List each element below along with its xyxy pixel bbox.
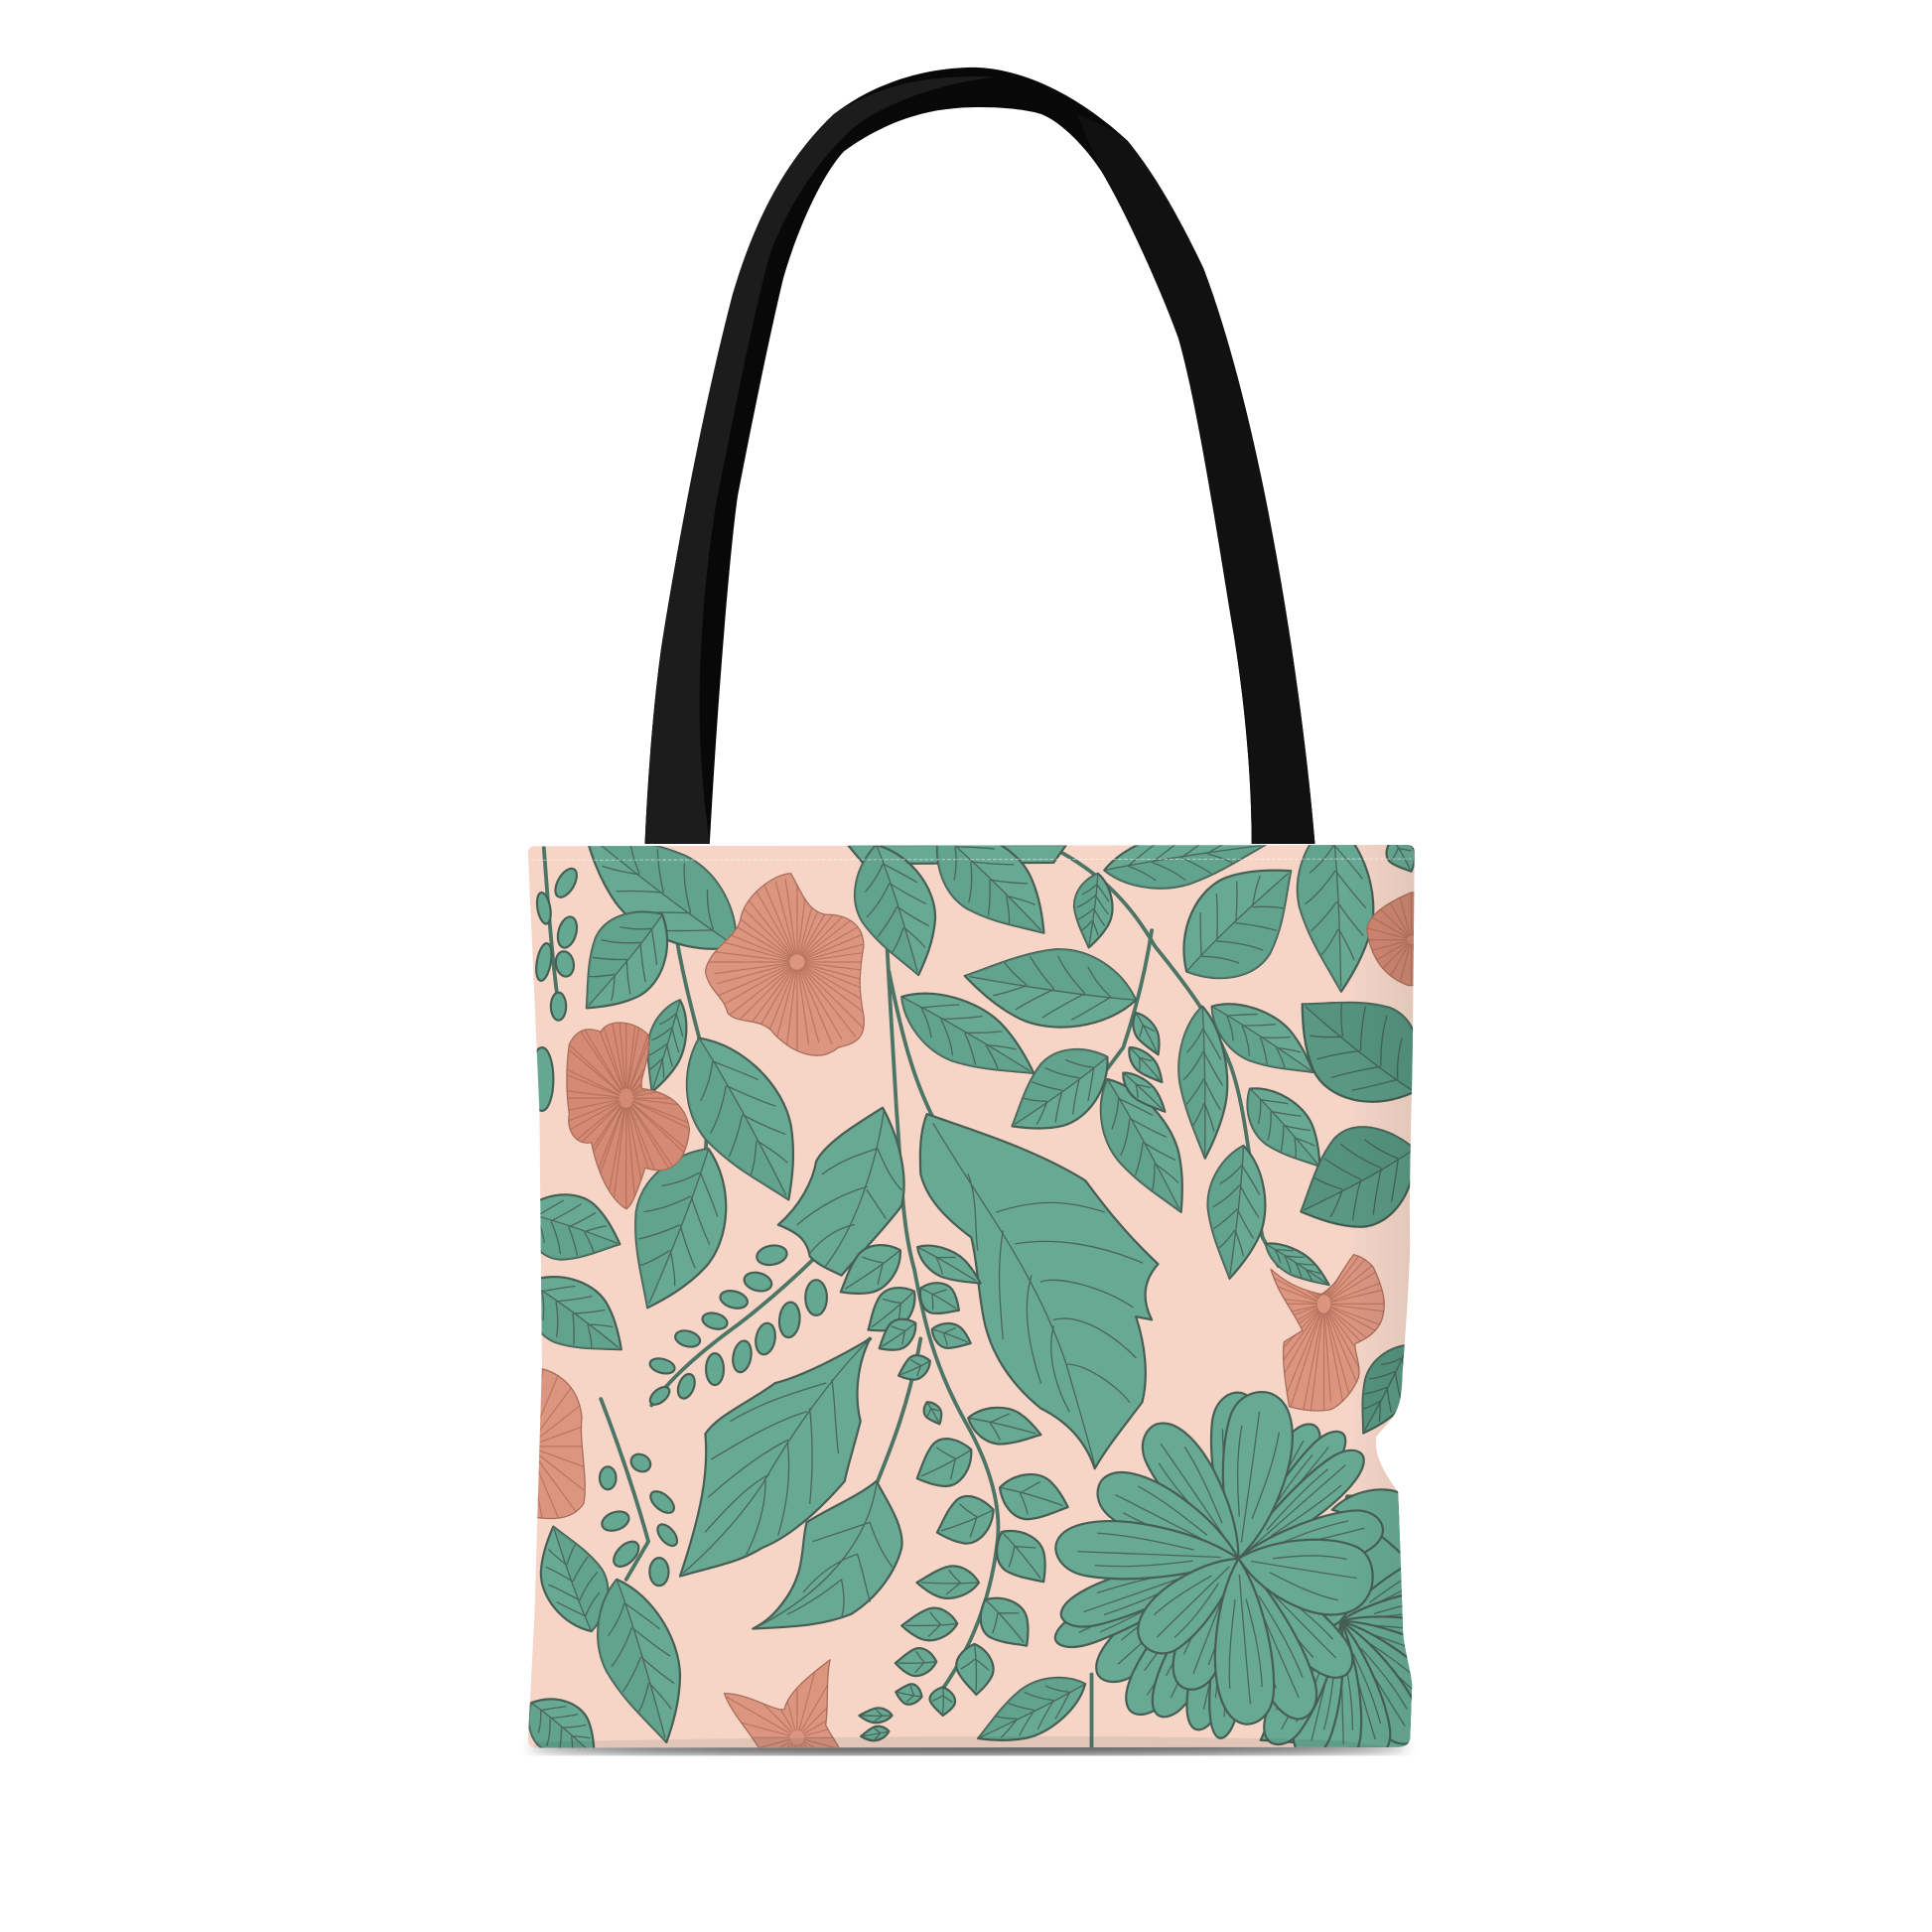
coral flower: left edge	[537, 1368, 586, 1519]
peach fabric background	[522, 839, 1421, 1753]
large teal flower	[1048, 1387, 1388, 1727]
upper-right leaf branch	[963, 845, 1330, 1287]
sprig: top left corner	[534, 865, 581, 1021]
large central leaf	[920, 1114, 1158, 1468]
coral flower: right	[1270, 1254, 1385, 1412]
coral flower: top	[705, 873, 865, 1056]
top-left leaves	[586, 846, 794, 1309]
sprig: middle left	[647, 1243, 827, 1408]
left edge leaves	[508, 1047, 701, 1777]
central left leaf	[778, 1108, 904, 1276]
back teal flower, lower right	[1259, 1488, 1412, 1747]
top-center leaves	[847, 846, 1067, 1074]
coral flower: bottom	[724, 1659, 840, 1747]
bottom leaf	[977, 1676, 1086, 1741]
tote bag body with floral print	[528, 845, 1415, 1747]
right edge leaves	[1271, 818, 1447, 1444]
sprig: lower left	[600, 1450, 681, 1586]
lower-left large leaf	[680, 1338, 870, 1577]
fabric shading and seam	[531, 839, 1421, 1753]
central cascading leaflets	[829, 1233, 1074, 1743]
back teal petals, lower left	[1095, 1624, 1235, 1739]
lower-center leaf	[753, 1481, 902, 1629]
coral flower: top right edge	[1366, 892, 1414, 987]
bag ground shadow	[529, 1740, 1407, 1754]
plant stems	[544, 845, 1279, 1747]
bag handle	[644, 68, 1314, 844]
coral flower: left	[566, 1022, 691, 1209]
